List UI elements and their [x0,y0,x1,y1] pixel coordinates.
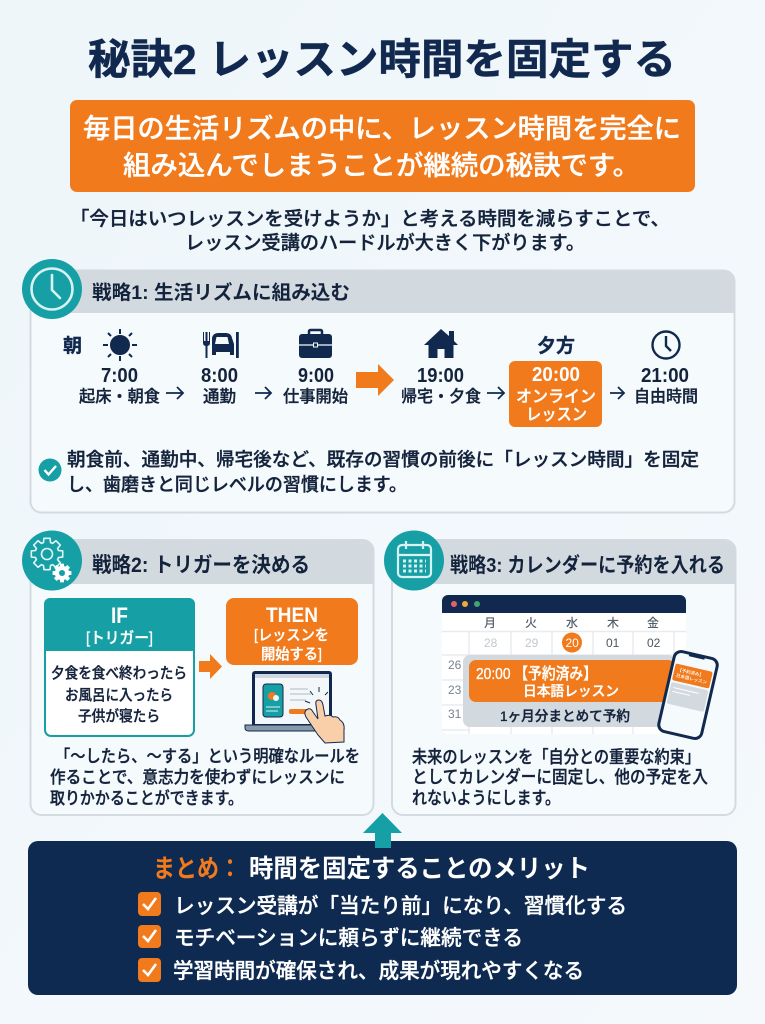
label: morning: 朝 [63,335,82,357]
strategy 3 description: としてカレンダーに固定し、他の予定を入 [412,767,708,787]
date row: 28 [484,636,498,650]
date row: 29 [525,636,539,650]
weekday labels: 木 [607,615,619,630]
21:00 step: 21:00 [641,365,689,387]
strategy 3 description: 未来のレッスンを「自分との重要な約束」 [412,747,700,767]
benefit 2: モチベーションに頼らずに継続できる [174,927,523,950]
summary heading: まとめ： [153,855,241,883]
strategy 1 description [67,449,699,495]
date row: 23 [448,683,462,697]
arrow [610,387,624,399]
panel: summary [28,841,737,995]
arrow [255,387,271,399]
title: 秘訣2 レッスン時間を固定する [88,36,676,83]
panel: strategy 1 [22,259,735,512]
icon: calendar badge [384,530,444,590]
icon: sun [103,329,137,361]
THEN box [226,598,358,665]
strategy 2 description: 「～したら、～する」という明確なルールを [55,747,360,766]
icon: briefcase [299,330,332,358]
booking block [463,655,675,727]
arrow: morning to evening [356,364,394,396]
weekday labels: 水 [566,615,578,630]
9:00 step: 9:00 [298,365,334,387]
9:00 step [283,365,348,406]
benefit 3: 学習時間が確保され、成果が現れやすくなる [173,960,584,983]
arrow [487,387,504,399]
date row: 31 [448,707,462,721]
booking block: 20:00 【予約済み】 [476,665,597,683]
icon: fork and car [203,332,239,358]
panel: strategy 3 [384,530,736,815]
strategy 3 description [412,747,708,808]
icon: house [424,329,458,358]
strategy 3 description: れないようにします。 [412,788,560,808]
IF box: 子供が寝たら [78,707,160,725]
strategy 1 description: し、歯磨きと同じレベルの習慣にします。 [67,474,407,495]
highlighted 20:00 online lesson: レッスン [526,406,587,424]
booking block: 日本語レッスン [523,683,619,699]
icon: clock [652,332,680,358]
weekday labels: 金 [647,615,659,630]
panel: strategy 2 [22,530,374,815]
strategy 2 heading: 戦略2: トリガーを決める [92,554,310,577]
7:00 step [79,365,160,406]
booking block: 1ヶ月分まとめて予約 [500,708,630,724]
summary heading: 時間を固定することのメリット [249,855,590,883]
icon: clock badge [22,259,82,319]
intro text: レッスン受講のハードルが大きく下がります。 [185,232,585,254]
7:00 step: 起床・朝食 [79,387,160,406]
highlighted 20:00 online lesson: オンライン [516,388,596,406]
7:00 step: 7:00 [101,365,138,387]
arrow: if to then [199,654,222,679]
intro text [70,208,670,254]
8:00 step [201,365,238,406]
IF box: 夕食を食べ終わったら [51,665,187,682]
strategy 2 description [50,747,360,808]
intro text: 「今日はいつレッスンを受けようか」と考える時間を減らすことで、 [70,208,670,230]
weekday labels: 火 [525,616,537,630]
orange key message banner: 毎日の生活リズムの中に、レッスン時間を完全に [83,114,681,144]
icon: laptop with pointing hand [245,671,344,743]
date row: 20 [566,636,579,650]
arrow [166,387,183,399]
icon: teal check [38,458,62,482]
label: evening: 夕方 [537,334,575,357]
IF box: IF [111,603,128,628]
date row: 02 [647,636,661,650]
strategy 2 description: 取りかかることができます。 [50,788,243,808]
calendar graphic [442,595,719,740]
arrow: up from summary [363,813,402,848]
orange key message banner: 組み込んでしまうことが継続の秘訣です。 [123,151,640,181]
strategy 2 description: 作ることで、意志力を使わずにレッスンに [50,768,345,787]
icon: gears badge [22,530,82,590]
date row: 26 [448,658,462,672]
THEN box: [レッスンを [254,627,329,644]
9:00 step: 仕事開始 [283,387,348,406]
weekday labels: 月 [484,616,496,630]
icon: phone: 日本語レッスン [675,672,708,686]
strategy 3 heading: 戦略3: カレンダーに予約を入れる [450,553,725,577]
19:00 step: 帰宅・夕食 [401,387,481,406]
orange key message banner [70,100,695,192]
IF box [44,598,195,736]
IF box: お風呂に入ったら [65,687,173,704]
highlighted 20:00 online lesson [509,361,602,427]
THEN box: 開始する] [261,646,322,663]
8:00 step: 通勤 [203,387,236,406]
icon: phone: 【予約済み】 [677,666,705,679]
strategy 1 heading: 戦略1: 生活リズムに組み込む [92,281,350,304]
icon: phone [657,650,719,740]
19:00 step: 19:00 [417,365,464,387]
date row [448,632,661,721]
highlighted 20:00 online lesson: 20:00 [532,364,580,386]
21:00 step: 自由時間 [634,387,698,406]
8:00 step: 8:00 [201,365,238,387]
21:00 step [634,365,698,406]
19:00 step [401,365,481,406]
weekday labels [484,615,659,630]
strategy 1 description: 朝食前、通勤中、帰宅後など、既存の習慣の前後に「レッスン時間」を固定 [67,449,699,470]
THEN box: THEN [266,604,318,627]
IF box: [トリガー] [86,629,153,647]
date row: 01 [606,636,620,650]
benefit 1: レッスン受講が「当たり前」になり、習慣化する [174,895,627,918]
